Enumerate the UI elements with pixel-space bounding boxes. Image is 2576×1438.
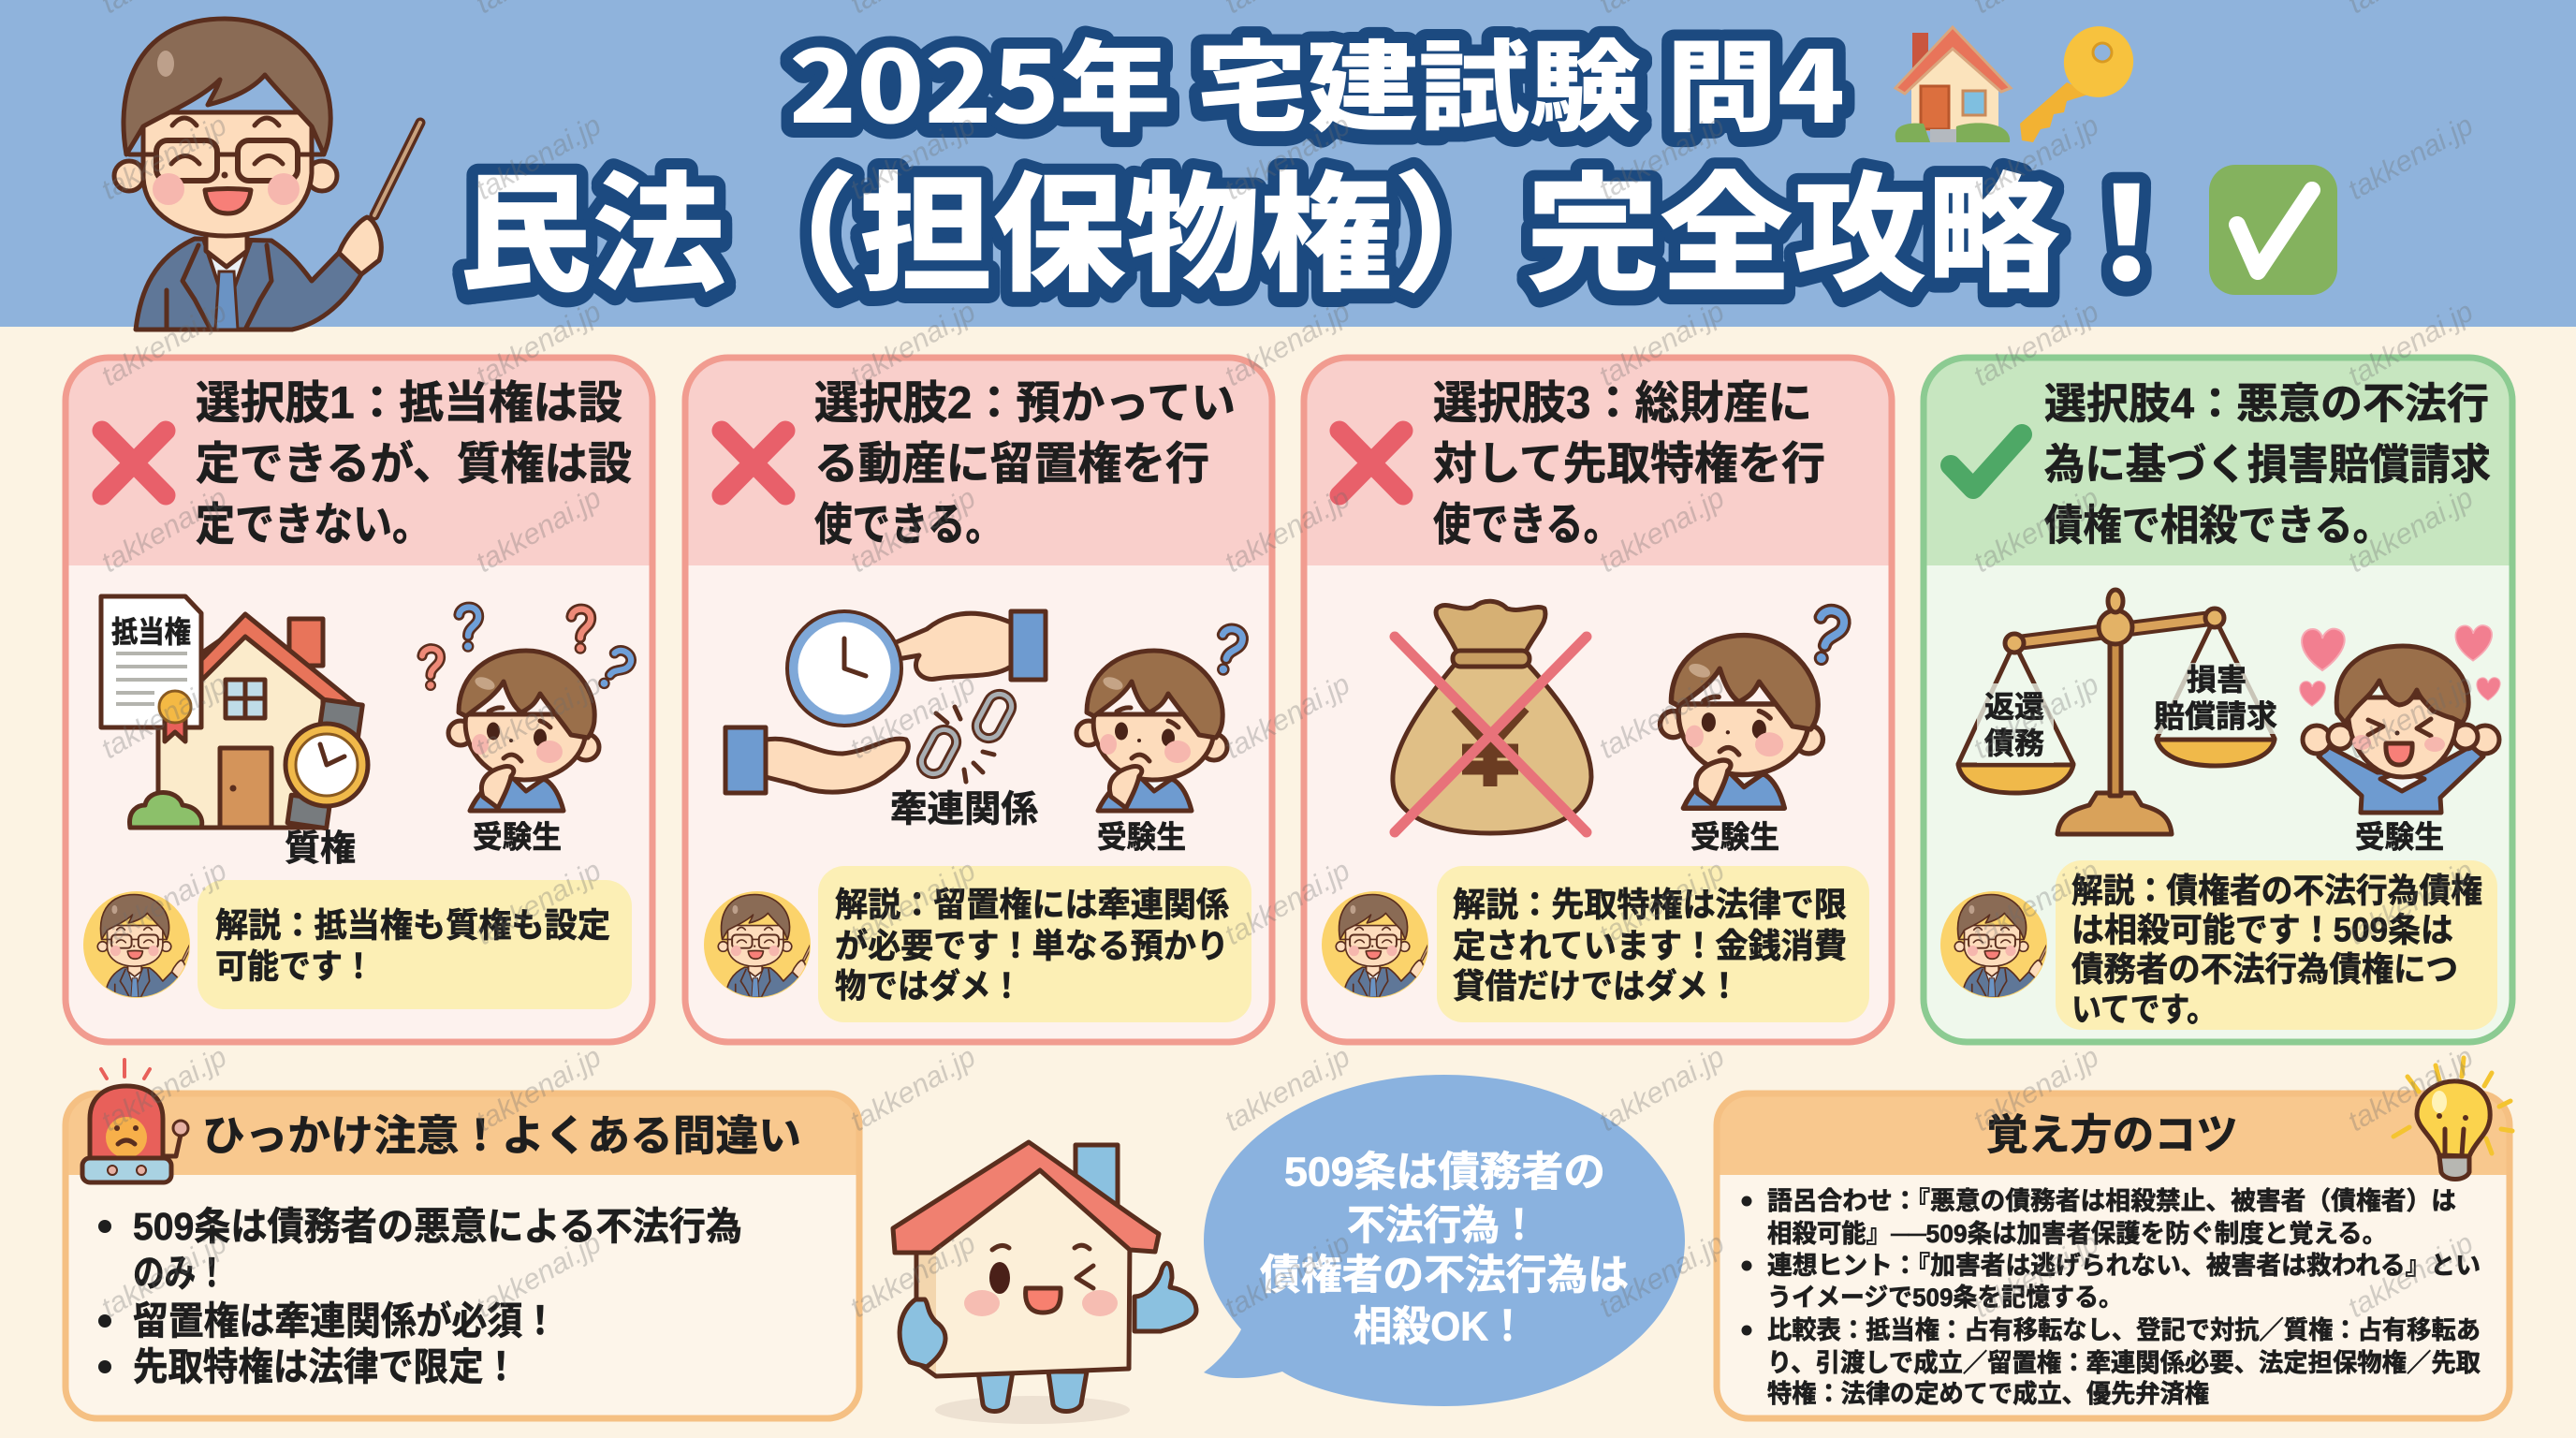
commentary bubble 1: 解説：抵当権も質権も設定 (215, 906, 610, 944)
option 4 statement: 為に基づく損害賠償請求 (2044, 440, 2491, 489)
watermark grid: takkenai.jp (1219, 1040, 1355, 1137)
commentary bubble 3: 解説：先取特権は法律で限 (1453, 886, 1847, 923)
icon: teacher with pointer (114, 19, 420, 330)
commentary bubble 2: 解説：留置権には牽連関係 (835, 886, 1229, 923)
teacher avatar (704, 891, 819, 998)
watermark grid: takkenai.jp (95, 1040, 232, 1137)
tips bullet list: 特権：法律の定めてで成立、優先弁済権 (1767, 1380, 2209, 1408)
watermark grid: takkenai.jp (470, 854, 607, 951)
watermark grid: takkenai.jp (1593, 109, 1730, 206)
watermark grid: takkenai.jp (1968, 1226, 2104, 1324)
panel: common mistakes (66, 1093, 859, 1418)
illustration: balance scale (1958, 590, 2277, 834)
commentary bubble 1 (198, 880, 632, 1009)
watermark grid: takkenai.jp (95, 109, 232, 206)
icon: light bulb (2393, 1058, 2512, 1180)
watermark grid: takkenai.jp (1968, 109, 2104, 206)
option 2 statement: 選択肢2：預かってい (814, 378, 1236, 429)
commentary bubble 2: 物ではダメ！ (835, 966, 1022, 1005)
document: 抵当権 (101, 596, 201, 741)
option 1 statement: 定できるが、質権は設 (196, 440, 632, 489)
watermark grid: takkenai.jp (2342, 295, 2479, 392)
watermark grid: takkenai.jp (2342, 1226, 2479, 1324)
speech bubble: 債権者の不法行為は (1260, 1253, 1629, 1298)
label: 受験生: 受験生 (2355, 820, 2444, 854)
option 3 statement: 使できる。 (1433, 500, 1621, 550)
speech bubble: 相殺OK！ (1354, 1303, 1527, 1350)
watermark grid: takkenai.jp (2342, 668, 2479, 765)
watch (285, 699, 368, 829)
tips bullet list (1741, 1187, 2481, 1408)
watermark grid: takkenai.jp (1593, 854, 1730, 951)
speech bubble: 不法行為！ (1347, 1202, 1538, 1249)
watermark grid: takkenai.jp (1219, 668, 1355, 765)
commentary bubble 4: いてです。 (2071, 990, 2217, 1028)
speech bubble (1204, 1075, 1685, 1406)
speech bubble: 509条は債務者の (1284, 1150, 1605, 1195)
label: 損害賠償請求: 損害 (2187, 663, 2247, 697)
watermark grid: takkenai.jp (1219, 481, 1355, 579)
panel: option 1 (66, 358, 652, 1042)
watermark grid: takkenai.jp (2342, 854, 2479, 951)
option 2 statement (814, 378, 1236, 550)
illustration: house with mortgage document and pledged watch (101, 596, 368, 869)
panel: option 3 (1304, 358, 1892, 1042)
teacher avatar (1322, 891, 1437, 998)
tips bullet list: うイメージで509条を記憶する。 (1767, 1284, 2123, 1312)
happy student with hearts (2300, 625, 2500, 813)
label: 質権: 質権 (285, 829, 356, 869)
title line 2: 民法（担保物権）完全攻略！ (459, 130, 2193, 317)
icon: house (1895, 27, 2011, 142)
watermark grid: takkenai.jp (1593, 295, 1730, 392)
watermark grid: takkenai.jp (1968, 668, 2104, 765)
option 2 statement: 使できる。 (814, 500, 1003, 550)
watermark grid: takkenai.jp (1219, 854, 1355, 951)
student confused (1076, 626, 1245, 811)
option 4 statement: 債権で相殺できる。 (2044, 502, 2392, 549)
icon: green check badge (2209, 165, 2337, 295)
label: 返還債務: 返還 (1984, 690, 2044, 724)
icon: correct check (1951, 434, 2022, 489)
watermark grid: takkenai.jp (844, 1040, 981, 1137)
option 1 statement (196, 378, 632, 550)
icon: warning siren (82, 1060, 188, 1182)
panel: option 2 (685, 358, 1272, 1042)
option 2 statement: る動産に留置権を行 (814, 440, 1209, 489)
document: 抵当権: 抵当権 (111, 615, 191, 649)
option 3 statement: 対して先取特権を行 (1433, 440, 1825, 489)
mistakes bullet list: 先取特権は法律で限定！ (133, 1345, 519, 1388)
watermark grid: takkenai.jp (95, 481, 232, 579)
watermark grid: takkenai.jp (470, 1226, 607, 1324)
label: 受験生: 受験生 (1097, 820, 1186, 854)
watermark grid: takkenai.jp (2342, 1040, 2479, 1137)
icon: wrong cross 1 (102, 431, 166, 495)
mistakes bullet list: 留置権は牽連関係が必須！ (133, 1299, 558, 1343)
option 1 statement: 定できない。 (196, 500, 432, 550)
label: 損害賠償請求 (2154, 663, 2277, 734)
teacher avatar (1940, 891, 2056, 998)
commentary bubble 2: が必要です！単なる預かり (835, 927, 1229, 964)
mistakes bullet list: のみ！ (133, 1252, 227, 1295)
mistakes heading: ひっかけ注意！よくある間違い (202, 1112, 801, 1159)
watermark grid: takkenai.jp (844, 109, 981, 206)
label: 返還債務 (1977, 683, 2054, 763)
tips bullet list: 比較表：抵当権：占有移転なし、登記で対抗／質権：占有移転あ (1767, 1316, 2481, 1344)
commentary bubble 4: は相殺可能です！509条は (2071, 910, 2453, 949)
watermark grid: takkenai.jp (470, 109, 607, 206)
commentary bubble 4: 債務者の不法行為債権につ (2071, 949, 2458, 989)
mascot: winking house (893, 1142, 1196, 1424)
mistakes bullet list (98, 1205, 742, 1388)
label: 受験生: 受験生 (473, 820, 562, 854)
label: 損害賠償請求: 賠償請求 (2154, 698, 2277, 734)
label: 返還債務: 債務 (1984, 726, 2044, 760)
header banner (0, 0, 2576, 327)
watermark grid: takkenai.jp (1968, 854, 2104, 951)
tips bullet list: 連想ヒント：『加害者は逃げられない、被害者は救われる』とい (1767, 1252, 2481, 1280)
watermark grid: takkenai.jp (95, 1226, 232, 1324)
watermark grid: takkenai.jp (470, 481, 607, 579)
panel: memory tips (1717, 1093, 2510, 1418)
label: 牽連関係: 牽連関係 (890, 790, 1038, 829)
illustration: crossed-out money bag (1393, 601, 1591, 833)
option 3 statement (1433, 378, 1825, 550)
icon: wrong cross 3 (1339, 431, 1403, 495)
commentary bubble 1: 可能です！ (215, 947, 374, 985)
tips bullet list: 相殺可能』──509条は加害者保護を防ぐ制度と覚える。 (1767, 1220, 2387, 1248)
commentary bubble 2 (818, 866, 1251, 1022)
watermark grid: takkenai.jp (95, 668, 232, 765)
icon: key (2020, 17, 2144, 142)
commentary bubble 3: 貸借だけではダメ！ (1453, 966, 1740, 1005)
icon: wrong cross 2 (722, 431, 785, 495)
watermark grid: takkenai.jp (470, 295, 607, 392)
title line 1: 2025年 宅建試験 問4 (789, 7, 1845, 152)
watermark grid: takkenai.jp (844, 295, 981, 392)
student confused (1661, 608, 1847, 808)
illustration: clock handed over and broken chain (725, 611, 1046, 793)
watermark grid: takkenai.jp (2342, 109, 2479, 206)
watermark grid: takkenai.jp (844, 668, 981, 765)
commentary bubble 3 (1437, 866, 1869, 1022)
watermark grid: takkenai.jp (1593, 481, 1730, 579)
watermark grid: takkenai.jp (1593, 668, 1730, 765)
watermark grid: takkenai.jp (1219, 109, 1355, 206)
label: 受験生: 受験生 (1690, 820, 1779, 854)
tips bullet list: り、引渡しで成立／留置権：牽連関係必要、法定担保物権／先取 (1767, 1349, 2481, 1377)
watermark grid: takkenai.jp (95, 295, 232, 392)
option 4 statement: 選択肢4：悪意の不法行 (2044, 380, 2489, 427)
watermark grid: takkenai.jp (1593, 1040, 1730, 1137)
commentary bubble 4: 解説：債権者の不法行為債権 (2071, 871, 2482, 910)
watermark grid: takkenai.jp (1968, 1040, 2104, 1137)
watermark grid: takkenai.jp (1968, 481, 2104, 579)
watermark grid: takkenai.jp (1593, 1226, 1730, 1324)
student confused with question marks (422, 608, 635, 811)
mistakes bullet list: 509条は債務者の悪意による不法行為 (133, 1205, 742, 1248)
commentary bubble 4 (2056, 860, 2497, 1030)
teacher avatar (83, 891, 198, 998)
watermark grid: takkenai.jp (470, 1040, 607, 1137)
watermark grid: takkenai.jp (844, 854, 981, 951)
panel: option 4 (correct) (1924, 358, 2512, 1042)
watermark grid: takkenai.jp (2342, 481, 2479, 579)
tips heading: 覚え方のコツ (1986, 1110, 2238, 1159)
tips bullet list: 語呂合わせ：『悪意の債務者は相殺禁止、被害者（債権者）は (1767, 1187, 2456, 1215)
watermark grid: takkenai.jp (1219, 295, 1355, 392)
watermark grid: takkenai.jp (844, 1226, 981, 1324)
option 4 statement (2044, 380, 2491, 549)
option 1 statement: 選択肢1：抵当権は設 (196, 378, 622, 429)
watermark grid: takkenai.jp (1219, 1226, 1355, 1324)
watermark grid: takkenai.jp (470, 668, 607, 765)
watermark grid: takkenai.jp (1968, 295, 2104, 392)
watermark grid: takkenai.jp (95, 854, 232, 951)
watermark grid: takkenai.jp (844, 481, 981, 579)
commentary bubble 3: 定されています！金銭消費 (1453, 927, 1847, 964)
option 3 statement: 選択肢3：総財産に (1433, 378, 1812, 429)
